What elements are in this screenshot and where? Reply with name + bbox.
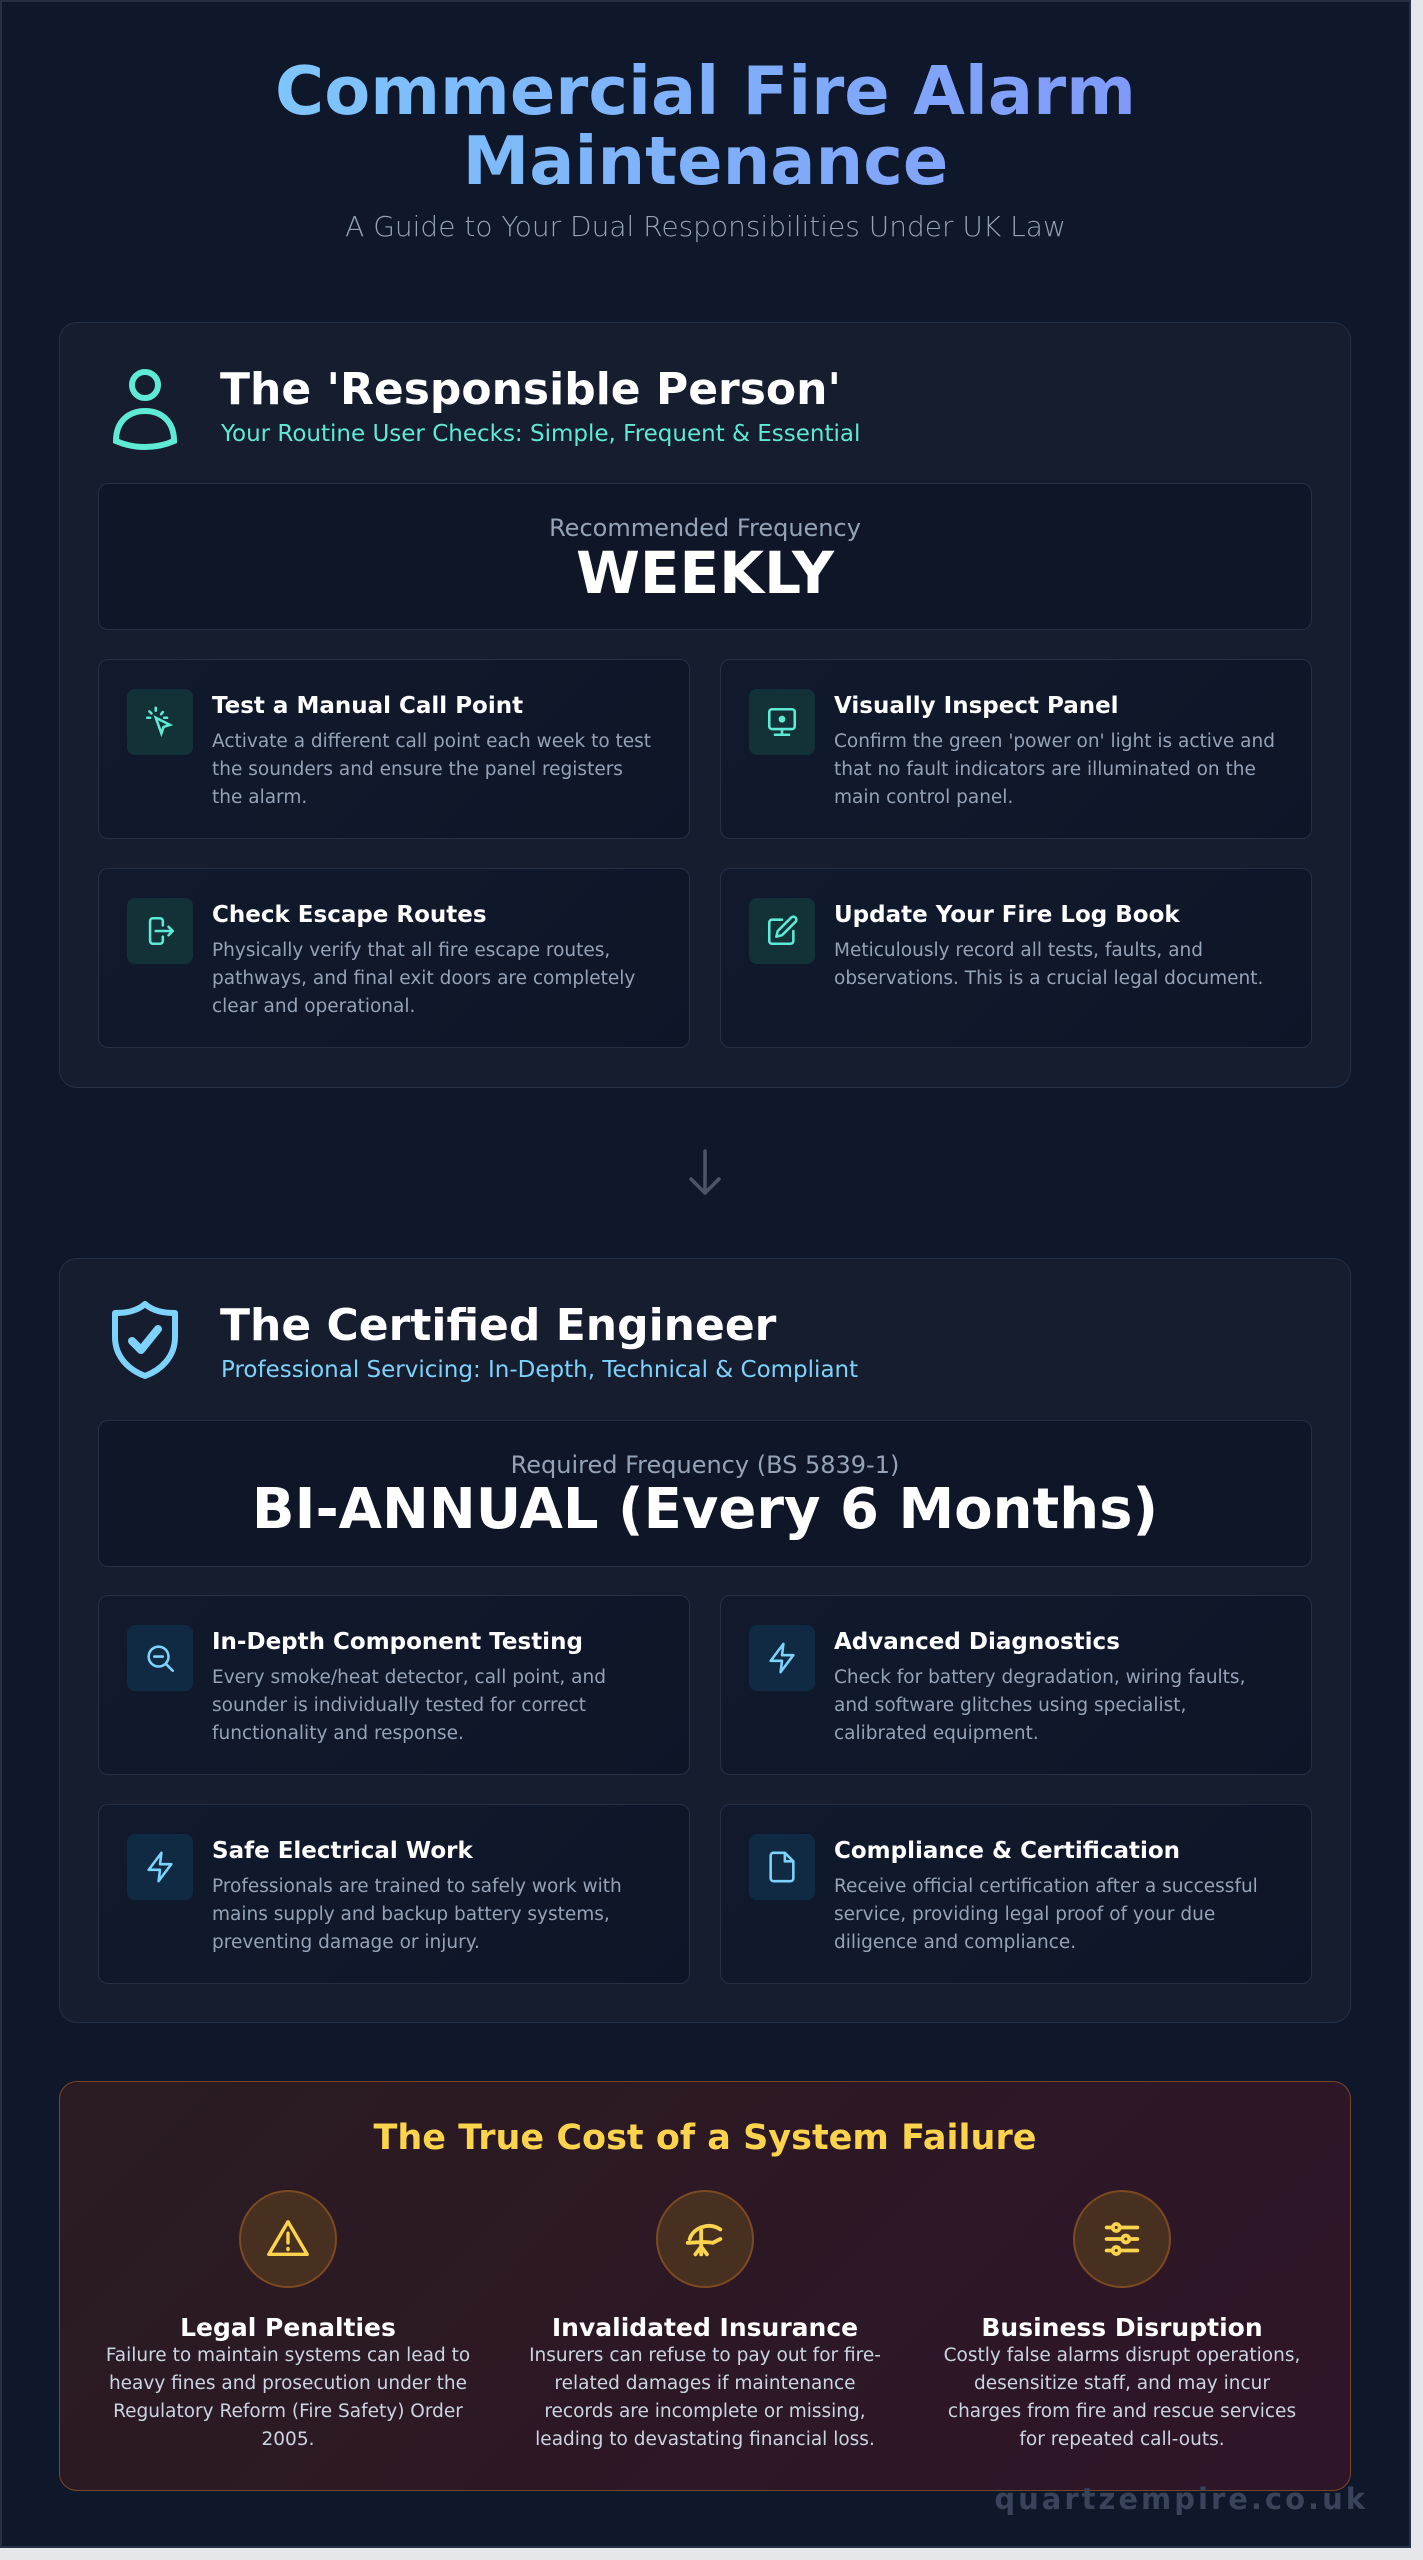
card: update fire log book: Update Your Fire Log Book bbox=[834, 902, 1180, 928]
card: in-depth component testing: In-Depth Component Testing bbox=[212, 1629, 583, 1655]
card: safe electrical work: mains supply and backup battery systems, bbox=[212, 1904, 610, 1925]
card: compliance & certification: Receive official certification after a successful bbox=[834, 1876, 1258, 1897]
card: test a manual call point bbox=[98, 659, 690, 839]
column: legal penalties bbox=[106, 2190, 470, 2450]
card: update fire log book bbox=[720, 868, 1312, 1048]
card: in-depth component testing: functionality and response. bbox=[212, 1723, 464, 1744]
card: compliance & certification: diligence and compliance. bbox=[834, 1932, 1076, 1953]
column: invalidated insurance bbox=[529, 2190, 881, 2450]
card: safe electrical work: preventing damage or injury. bbox=[212, 1932, 480, 1953]
card: visually inspect panel: that no fault indicators are illuminated on the bbox=[834, 759, 1256, 780]
card: visually inspect panel: Visually Inspect Panel bbox=[834, 693, 1119, 719]
card: advanced diagnostics bbox=[720, 1595, 1312, 1775]
subheading: Professional Servicing: In-Depth, Technical & Compliant bbox=[221, 1357, 858, 1383]
icon: exit door bbox=[127, 898, 193, 964]
card: check escape routes: Check Escape Routes bbox=[212, 902, 487, 928]
card: advanced diagnostics: Check for battery degradation, wiring faults, bbox=[834, 1667, 1245, 1688]
card: check escape routes: pathways, and final exit doors are completely bbox=[212, 968, 635, 989]
icon: pointer click bbox=[127, 689, 193, 755]
card: compliance & certification: service, providing legal proof of your due bbox=[834, 1904, 1215, 1925]
column: legal penalties: Legal Penalties bbox=[180, 2313, 396, 2342]
column: business disruption: Costly false alarms disrupt operations, bbox=[944, 2345, 1300, 2366]
subtitle: A Guide to Your Dual Responsibilities Under UK Law bbox=[345, 210, 1066, 243]
heading: The True Cost of a System Failure bbox=[374, 2118, 1036, 2158]
icon: shield check bbox=[112, 1300, 178, 1379]
icon: sliders bbox=[1073, 2190, 1171, 2288]
arrow: down bbox=[689, 1149, 721, 1195]
icon: monitor bbox=[749, 689, 815, 755]
card: in-depth component testing: sounder is individually tested for correct bbox=[212, 1695, 586, 1716]
heading: The Certified Engineer bbox=[220, 1300, 776, 1351]
card: check escape routes: Physically verify that all fire escape routes, bbox=[212, 940, 610, 961]
column: invalidated insurance: leading to devastating financial loss. bbox=[535, 2429, 875, 2450]
card: visually inspect panel: Confirm the green 'power on' light is active and bbox=[834, 731, 1275, 752]
frequency box: bi-annual bbox=[98, 1420, 1312, 1567]
card: compliance & certification bbox=[720, 1804, 1312, 1984]
title: Maintenance bbox=[463, 122, 948, 200]
card: test a manual call point: Test a Manual Call Point bbox=[212, 693, 523, 719]
icon: umbrella off bbox=[656, 2190, 754, 2288]
icon: lightning bbox=[749, 1625, 815, 1691]
icon: pencil square bbox=[749, 898, 815, 964]
frequency box: weekly bbox=[98, 483, 1312, 630]
card: visually inspect panel: main control panel. bbox=[834, 787, 1013, 808]
column: legal penalties: 2005. bbox=[262, 2429, 314, 2450]
heading: The 'Responsible Person' bbox=[220, 364, 841, 415]
card: check escape routes bbox=[98, 868, 690, 1048]
card: update fire log book: observations. This is a crucial legal document. bbox=[834, 968, 1263, 989]
column: business disruption: charges from fire and rescue services bbox=[948, 2401, 1296, 2422]
column: business disruption: Business Disruption bbox=[981, 2313, 1263, 2342]
icon: magnifier bbox=[127, 1625, 193, 1691]
column: business disruption: for repeated call-outs. bbox=[1019, 2429, 1225, 2450]
column: legal penalties: Failure to maintain systems can lead to bbox=[106, 2345, 470, 2366]
frequency box: bi-annual: Required Frequency (BS 5839-1) bbox=[511, 1451, 899, 1479]
panel: responsible person bbox=[59, 322, 1351, 1088]
column: invalidated insurance: Insurers can refuse to pay out for fire- bbox=[529, 2345, 881, 2366]
card: test a manual call point: the alarm. bbox=[212, 787, 307, 808]
card: safe electrical work: Professionals are trained to safely work with bbox=[212, 1876, 622, 1897]
frequency box: weekly: Recommended Frequency bbox=[549, 514, 861, 542]
icon: person bbox=[113, 369, 177, 450]
column: invalidated insurance: Invalidated Insurance bbox=[552, 2313, 858, 2342]
card: safe electrical work: Safe Electrical Work bbox=[212, 1838, 473, 1864]
column: business disruption: desensitize staff, and may incur bbox=[974, 2373, 1270, 2394]
watermark: quartzempire.co.uk bbox=[994, 2482, 1368, 2516]
card: compliance & certification: Compliance & Certification bbox=[834, 1838, 1180, 1864]
panel header: certified engineer bbox=[112, 1300, 858, 1383]
card: visually inspect panel bbox=[720, 659, 1312, 839]
column: invalidated insurance: related damages if maintenance bbox=[554, 2373, 856, 2394]
column: legal penalties: heavy fines and prosecution under the bbox=[109, 2373, 467, 2394]
card: test a manual call point: Activate a different call point each week to test bbox=[212, 731, 651, 752]
card: advanced diagnostics: Advanced Diagnostics bbox=[834, 1629, 1120, 1655]
title: Commercial Fire Alarm bbox=[275, 52, 1136, 130]
frequency box: weekly: WEEKLY bbox=[576, 539, 834, 607]
icon: document bbox=[749, 1834, 815, 1900]
card: in-depth component testing bbox=[98, 1595, 690, 1775]
column: business disruption bbox=[944, 2190, 1300, 2450]
icon: warning bbox=[239, 2190, 337, 2288]
panel: cost of failure bbox=[59, 2081, 1351, 2491]
card: advanced diagnostics: calibrated equipment. bbox=[834, 1723, 1039, 1744]
card: check escape routes: clear and operational. bbox=[212, 996, 415, 1017]
card: safe electrical work bbox=[98, 1804, 690, 1984]
column: invalidated insurance: records are incomplete or missing, bbox=[544, 2401, 866, 2422]
card: advanced diagnostics: and software glitches using specialist, bbox=[834, 1695, 1186, 1716]
frequency box: bi-annual: BI-ANNUAL (Every 6 Months) bbox=[252, 1477, 1158, 1542]
card: update fire log book: Meticulously record all tests, faults, and bbox=[834, 940, 1203, 961]
card: in-depth component testing: Every smoke/heat detector, call point, and bbox=[212, 1667, 606, 1688]
icon: lightning bbox=[127, 1834, 193, 1900]
panel header: responsible person bbox=[113, 364, 860, 450]
column: legal penalties: Regulatory Reform (Fire Safety) Order bbox=[113, 2401, 463, 2422]
title bbox=[0, 56, 1411, 196]
subheading: Your Routine User Checks: Simple, Frequent & Essential bbox=[221, 421, 860, 447]
card: test a manual call point: the sounders and ensure the panel registers bbox=[212, 759, 623, 780]
panel: certified engineer bbox=[59, 1258, 1351, 2023]
